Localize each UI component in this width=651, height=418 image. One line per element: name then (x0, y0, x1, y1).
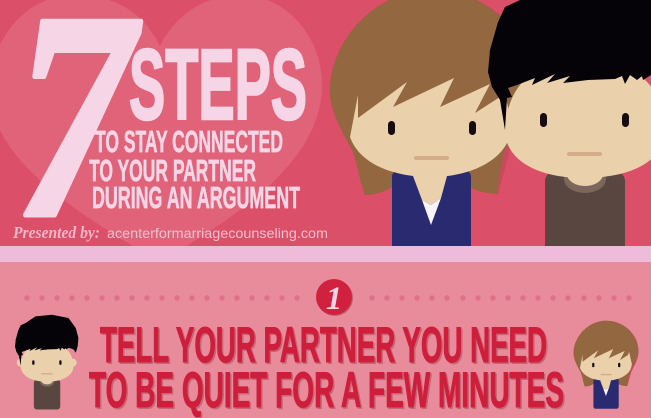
step number badge (316, 279, 353, 317)
dotted line right (369, 295, 632, 301)
subtitle: DURING AN ARGUMENT (92, 180, 300, 215)
section background (0, 262, 651, 418)
step number badge: 1 (326, 281, 342, 317)
subtitle (89, 124, 300, 215)
character: large man (488, 0, 651, 262)
presenter credit: Presented by: (12, 223, 100, 242)
character: small woman (574, 321, 639, 409)
header background (0, 0, 651, 246)
subtitle: TO STAY CONNECTED (95, 124, 283, 159)
presenter credit (12, 223, 328, 242)
character: small man (15, 315, 78, 409)
subtitle: TO YOUR PARTNER (89, 153, 256, 188)
dotted line left (24, 295, 300, 301)
pink divider band (0, 246, 651, 262)
character: large woman (330, 0, 533, 265)
step heading (89, 317, 566, 418)
presenter credit: acenterformarriagecounseling.com (107, 225, 328, 241)
heart background (0, 0, 322, 262)
heading: STEPS: STEPS (129, 29, 307, 141)
